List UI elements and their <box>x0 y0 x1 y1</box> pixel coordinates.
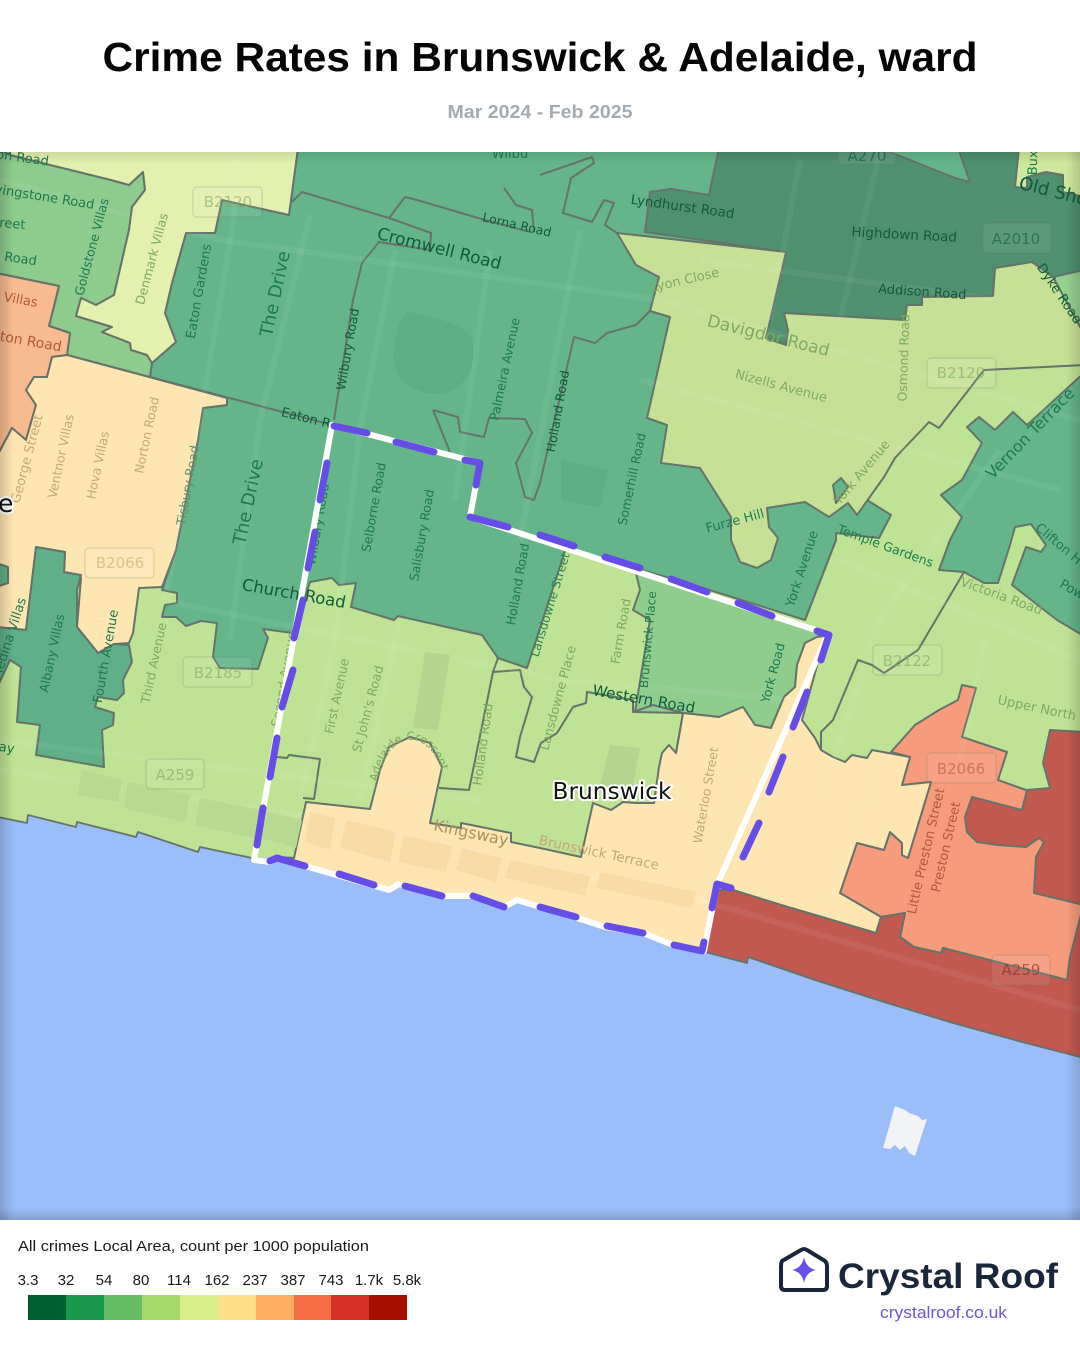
legend values: 1.7k <box>355 1272 384 1289</box>
road labels: Lyndhurst Road <box>630 192 735 222</box>
legend values: 162 <box>204 1272 230 1289</box>
place labels: Brunswick: Brunswick <box>552 779 672 805</box>
legend values: 80 <box>133 1272 149 1289</box>
logo: Crystal Roof <box>779 1247 1058 1322</box>
legend values: 3.3 <box>18 1272 38 1289</box>
road labels: Road <box>3 250 38 269</box>
road labels: Wilbury Road <box>333 307 362 391</box>
area: peach Waterloo Street and Kingsway <box>277 636 931 952</box>
road labels: Goldstone Villas <box>71 196 112 297</box>
area: pale yellow Denmark Villas <box>10 148 298 363</box>
map edge vignette <box>0 152 1080 1220</box>
road labels <box>0 152 1080 936</box>
road labels: Temple Gardens <box>835 521 935 570</box>
road labels: Victoria Road <box>958 575 1044 618</box>
area: Dyke Road medium green <box>1053 270 1080 334</box>
area: peach west <box>0 355 227 653</box>
road labels: Highdown Road <box>851 224 957 246</box>
road labels: Farm Road <box>607 597 634 665</box>
road labels: Lorna Road <box>481 209 553 240</box>
road labels: Lansdowne Place <box>536 644 579 752</box>
area: medium green north-west <box>0 148 152 377</box>
legend colour scale <box>28 1295 407 1320</box>
area: salmon Preston Street <box>840 685 1080 980</box>
road labels: Kingsway <box>432 815 510 850</box>
ward boundary: white line with purple dashes <box>254 425 829 951</box>
road number badges: B2122 <box>883 652 931 670</box>
road labels: Tisbury Road <box>173 444 202 527</box>
road number badges: B2066 <box>937 760 985 778</box>
road labels: Adelaide Crescent <box>370 731 448 782</box>
legend values: 5.8k <box>393 1272 422 1289</box>
legend values: 32 <box>58 1272 74 1289</box>
road labels: Ventnor Villas <box>44 413 77 500</box>
road labels: Holland Road <box>469 702 496 786</box>
road labels: George Street <box>9 413 47 505</box>
legend values: 237 <box>242 1272 268 1289</box>
internal boundary lines <box>150 157 964 799</box>
road labels: St John's Road <box>349 664 386 754</box>
road labels: Albany Villas <box>36 612 67 694</box>
legend values: 114 <box>167 1272 191 1289</box>
area: green triangle north <box>880 148 970 182</box>
road labels: Waterloo Street <box>690 746 721 845</box>
road labels: First Avenue <box>321 657 352 735</box>
road labels: Denmark Villas <box>132 211 171 306</box>
background: lime neighbourhoods <box>0 152 1080 1220</box>
road labels: Preston Street <box>929 801 964 894</box>
road labels: Church Road <box>241 575 347 612</box>
region boundaries: lime neighbourhoods <box>0 148 1080 1060</box>
brand name: Crystal Roof <box>838 1257 1058 1296</box>
road labels: Palmeira Avenue <box>486 316 523 422</box>
road labels: The Drive <box>256 249 295 340</box>
legend values: 743 <box>318 1272 344 1289</box>
legend title: All crimes Local Area, count per 1000 population <box>18 1238 369 1255</box>
icon: pier in the sea <box>883 1106 927 1156</box>
road number badges: B2120 <box>204 193 252 211</box>
road labels: Hova Villas <box>83 430 112 500</box>
road labels: Eaton R <box>279 405 332 432</box>
area: large green north zone <box>150 148 1080 669</box>
road labels: Nizells Avenue <box>733 367 829 406</box>
road labels: York Road <box>757 641 788 705</box>
road labels: Eaton Gardens <box>184 243 215 340</box>
map details: parks and building blocks <box>78 312 696 908</box>
road labels: Norton Road <box>131 395 162 475</box>
legend values: 387 <box>280 1272 306 1289</box>
area: orange west <box>0 273 70 458</box>
legend values: 54 <box>96 1272 112 1289</box>
road labels: Brunswick Terrace <box>537 833 660 874</box>
area: York Avenue diamond <box>833 478 848 503</box>
road labels: Second Avenue <box>268 630 299 728</box>
area: medium green York Road <box>633 573 825 728</box>
road labels: York Avenue <box>830 437 894 509</box>
road labels: Villas <box>2 290 39 311</box>
road labels: Brunswick Place <box>637 591 659 689</box>
road number badges: A259 <box>1002 961 1040 979</box>
legend values <box>18 1272 422 1289</box>
road labels: York Avenue <box>783 529 822 610</box>
road texture <box>0 152 1080 1010</box>
road labels: Vernon Terrace <box>982 384 1078 483</box>
area: Vernon Terrace green <box>939 373 1080 636</box>
area: lime Davigdor Road <box>617 233 1080 568</box>
road labels: Upper North <box>996 693 1077 724</box>
road number badges: A2010 <box>992 230 1040 248</box>
road number badges: B2185 <box>194 664 242 682</box>
road labels: Holland Road <box>503 542 532 626</box>
choropleth map <box>0 152 1080 1220</box>
area: red seafront <box>705 890 1080 1060</box>
area: Albany Villas green <box>0 547 132 767</box>
road labels: Lansdowne Street <box>528 551 573 658</box>
road labels: Fourth Avenue <box>91 609 122 704</box>
road labels: Selborne Road <box>358 461 389 553</box>
road number badges: A259 <box>156 766 194 784</box>
water: English Channel <box>0 815 1080 1224</box>
road labels: Addison Road <box>878 282 967 303</box>
road labels: Third Avenue <box>137 621 170 706</box>
icon: house with star <box>781 1249 827 1290</box>
area: red upper east <box>965 730 1080 905</box>
road labels: Western Road <box>591 681 697 717</box>
area: pale north-east corner <box>1015 148 1080 197</box>
road number badges: B2066 <box>96 554 144 572</box>
road number badges <box>85 140 1051 985</box>
road labels: Davigdor Road <box>705 311 831 361</box>
road number badges: B2120 <box>937 364 985 382</box>
website: crystalroof.co.uk <box>880 1304 1008 1322</box>
road labels: Little Preston Street <box>905 787 948 916</box>
road labels: Furze Hill <box>704 507 766 537</box>
area: dark green Highdown <box>645 148 1080 345</box>
road labels: Cromwell Road <box>375 224 503 274</box>
road labels: Somerhill Road <box>614 432 649 527</box>
area: small green fragments far west <box>0 563 8 587</box>
road labels: Holland Road <box>543 369 572 453</box>
legend <box>18 1238 422 1320</box>
coastline <box>0 815 1080 1058</box>
road labels: Wilbury Road <box>303 482 332 566</box>
road labels: Salisbury Road <box>406 488 437 582</box>
title: Crime Rates in Brunswick & Adelaide, ward <box>102 34 978 80</box>
road labels: ton Road <box>0 329 63 355</box>
road labels: Osmond Road <box>894 314 913 402</box>
road labels: The Drive <box>229 457 268 548</box>
road labels: Lyon Close <box>650 265 721 296</box>
place labels: Brunswick <box>0 489 672 805</box>
subtitle: date range: Mar 2024 - Feb 2025 <box>448 101 632 122</box>
